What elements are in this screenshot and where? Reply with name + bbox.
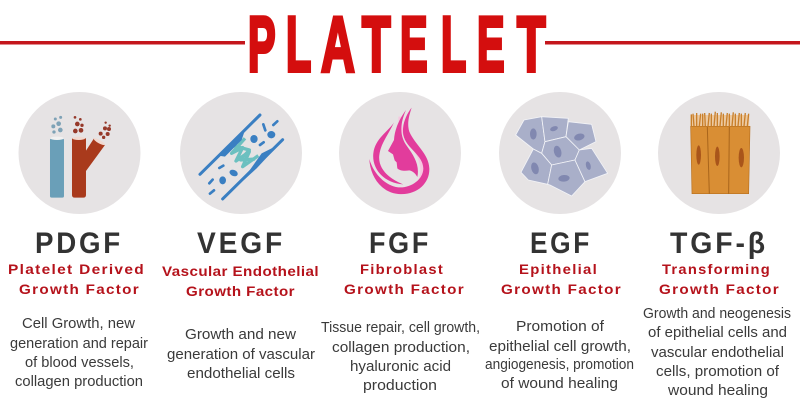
heading: TGF-β: TGF-β	[670, 227, 768, 260]
subtitle: Vascular Endothelial Growth Factor: Growth Factor	[186, 283, 295, 299]
title: E	[477, 1, 505, 88]
subtitle: Platelet Derived Growth Factor	[8, 261, 145, 297]
description: EGF: angiogenesis, promotion	[485, 357, 634, 373]
icon: blood vessels	[18, 92, 140, 214]
title: P	[248, 1, 276, 88]
description: TGF-β: of epithelial cells and	[648, 325, 787, 341]
subtitle: Vascular Endothelial Growth Factor: Vascular Endothelial	[162, 263, 319, 279]
title: T	[517, 1, 546, 88]
description: VEGF	[167, 327, 315, 382]
panel: PDGF	[8, 92, 148, 390]
title rule: right	[545, 41, 800, 44]
icon: damaged vessel	[180, 92, 302, 214]
description: FGF	[321, 320, 480, 394]
heading: FGF: FGF	[369, 227, 431, 260]
title rule: left	[0, 41, 245, 44]
subtitle: Epithelial Growth Factor	[501, 261, 622, 297]
description: PDGF: collagen production	[15, 374, 143, 390]
title: E	[400, 1, 428, 88]
subtitle: Fibroblast Growth Factor: Fibroblast	[360, 261, 444, 277]
description: TGF-β	[643, 306, 791, 399]
description: FGF: hyaluronic acid	[350, 359, 451, 375]
title: L	[286, 1, 311, 88]
title: T	[362, 1, 391, 88]
heading: EGF: EGF	[530, 227, 592, 260]
subtitle: Fibroblast Growth Factor: Growth Factor	[344, 281, 465, 297]
description: PDGF: Cell Growth, new	[22, 316, 136, 332]
description: PDGF: generation and repair	[10, 336, 148, 352]
icon: flame with face	[339, 92, 461, 214]
panel: EGF	[485, 92, 634, 392]
subtitle: Epithelial Growth Factor: Growth Factor	[501, 281, 622, 297]
description: PDGF	[10, 316, 148, 390]
description: EGF: Promotion of	[516, 319, 605, 335]
description: FGF: Tissue repair, cell growth,	[321, 320, 480, 336]
description: VEGF: generation of vascular	[167, 347, 315, 363]
title: L	[441, 1, 466, 88]
description: PDGF: of blood vessels,	[25, 355, 134, 371]
heading: VEGF: VEGF	[197, 227, 285, 260]
panel: VEGF	[162, 92, 319, 382]
description: EGF: epithelial cell growth,	[489, 339, 631, 355]
panel: TGF-β	[643, 92, 791, 399]
subtitle: Transforming Growth Factor	[659, 261, 780, 297]
subtitle: Fibroblast Growth Factor	[344, 261, 465, 297]
icon: epithelial cells	[499, 92, 621, 214]
subtitle: Platelet Derived Growth Factor: Growth Factor	[19, 281, 140, 297]
description: EGF: of wound healing	[501, 376, 618, 392]
description: FGF: production	[363, 378, 437, 394]
description: TGF-β: vascular endothelial	[651, 345, 784, 361]
subtitle: Vascular Endothelial Growth Factor	[162, 263, 319, 299]
description: FGF: collagen production,	[332, 340, 470, 356]
description: VEGF: endothelial cells	[187, 366, 295, 382]
subtitle: Platelet Derived Growth Factor: Platelet Derived	[8, 261, 145, 277]
subtitle: Transforming Growth Factor: Growth Factor	[659, 281, 780, 297]
description: TGF-β: cells, promotion of	[656, 364, 780, 380]
description: EGF	[485, 319, 634, 392]
description: VEGF: Growth and new	[185, 327, 297, 343]
icon: columnar cells	[658, 92, 780, 214]
title: A	[321, 1, 355, 88]
title	[248, 1, 546, 88]
description: TGF-β: Growth and neogenesis	[643, 306, 791, 322]
description: TGF-β: wound healing	[667, 383, 768, 399]
heading: PDGF: PDGF	[35, 227, 123, 260]
panel: FGF	[321, 92, 480, 394]
subtitle: Epithelial Growth Factor: Epithelial	[519, 261, 598, 277]
subtitle: Transforming Growth Factor: Transforming	[662, 261, 771, 277]
